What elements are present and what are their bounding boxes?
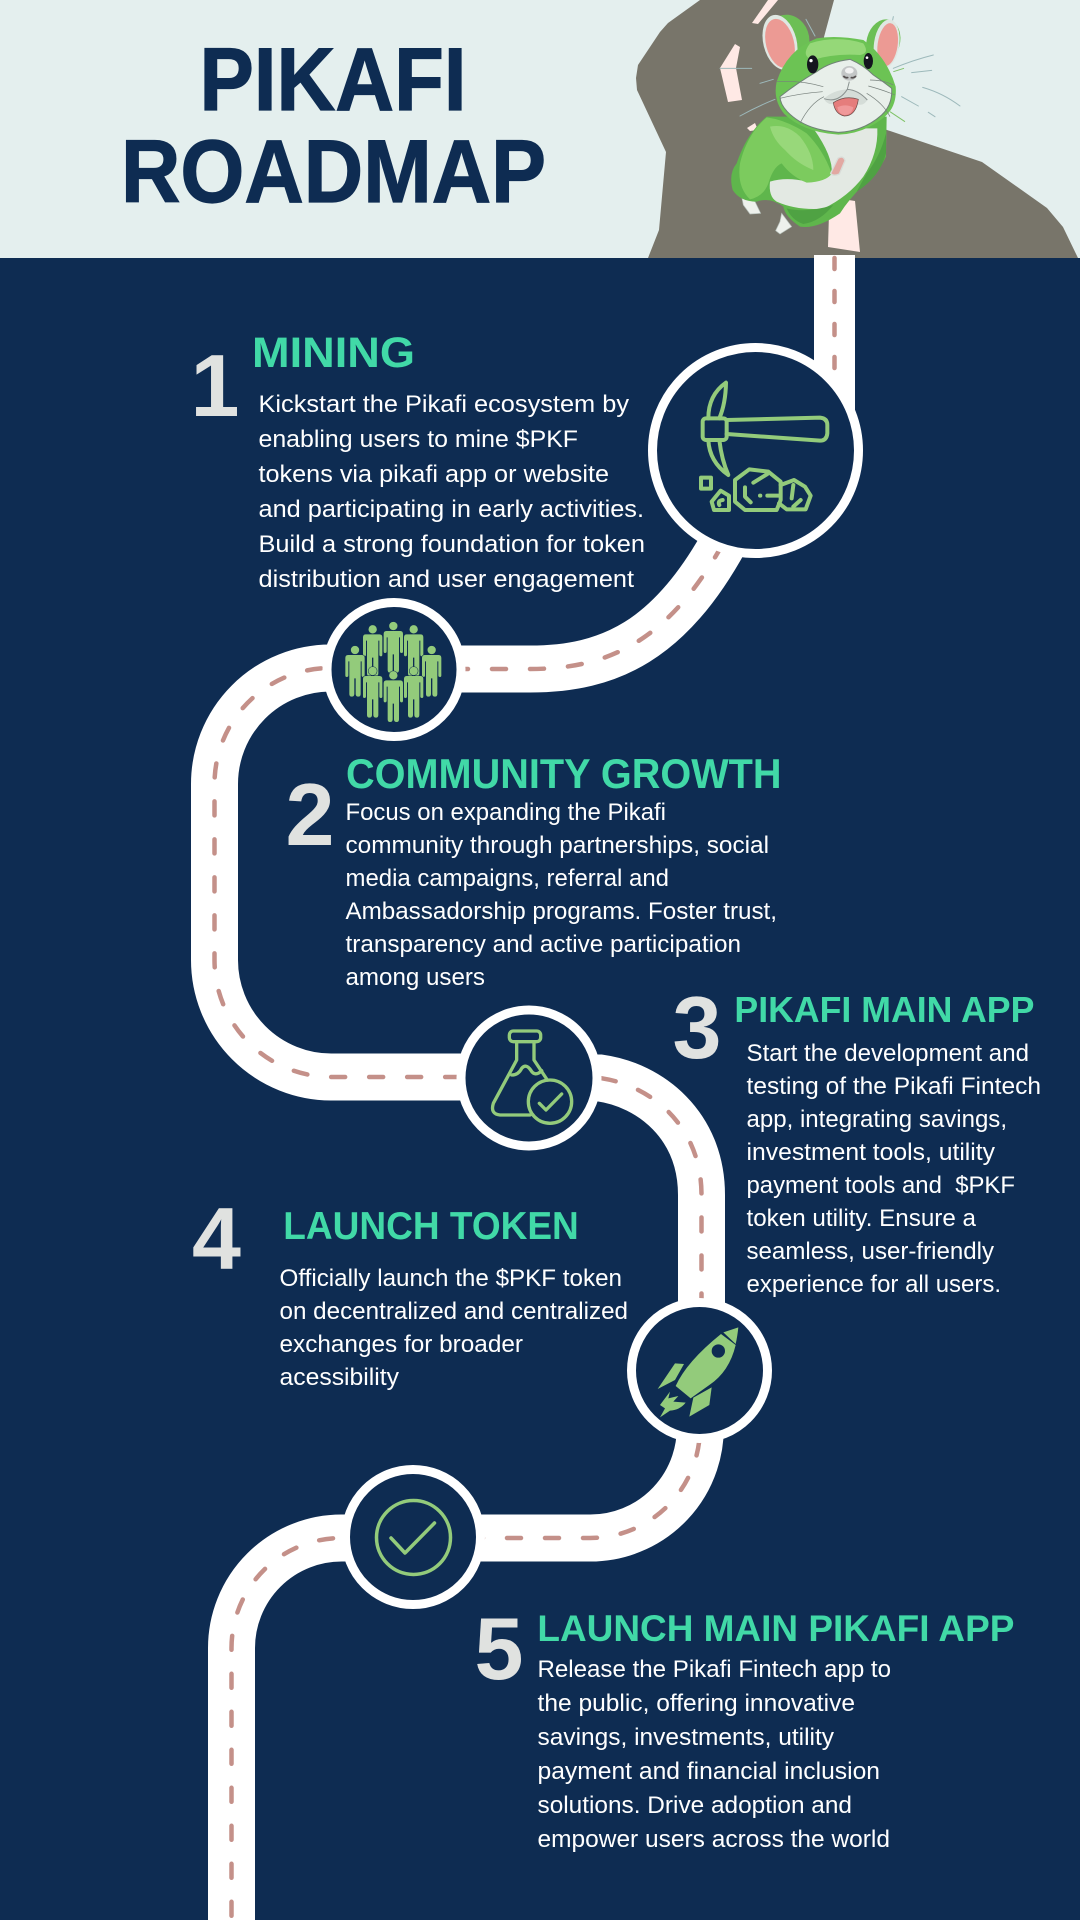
centre-line dashes [214, 255, 834, 1920]
body text: launch main pikafi app [538, 1656, 891, 1853]
body text: community growth: Focus on expanding the Pikafi [346, 799, 666, 826]
body text: mining: enabling users to mine $PKF [258, 426, 578, 453]
body text: pikafi main app: Start the development and [746, 1040, 1029, 1067]
body text: launch token: on decentralized and centralized [280, 1298, 628, 1325]
panel: step 4 launch token [192, 1189, 628, 1391]
body text: community growth: among users [346, 964, 485, 991]
heading: pikafi main app: PIKAFI MAIN APP [734, 989, 1034, 1030]
body text: mining: and participating in early activities. [258, 496, 644, 523]
icon: check mark in circle [346, 1470, 480, 1604]
heading: launch token: LAUNCH TOKEN [283, 1205, 579, 1248]
body text: community growth [346, 799, 777, 991]
road segment from mining to community [450, 540, 725, 669]
body text: mining [258, 391, 645, 593]
body text: mining: Build a strong foundation for token [258, 531, 645, 558]
feet [742, 189, 854, 234]
road segment from community to main app [214, 668, 470, 1077]
road segment to page bottom [232, 1538, 350, 1920]
panel: step 5 launch main pikafi app [475, 1599, 1014, 1853]
body text: launch main pikafi app: Release the Pikafi Fintech app to [538, 1656, 891, 1683]
body text: launch main pikafi app: payment and financial inclusion [538, 1758, 880, 1785]
mascot: green hamster [720, 9, 960, 234]
ears [761, 9, 816, 68]
heading: community growth: COMMUNITY GROWTH [346, 750, 782, 797]
road segment from main app to launch token [590, 1078, 702, 1320]
icon: flask with check in circle [461, 1010, 597, 1146]
body text: launch main pikafi app: savings, investments, utility [538, 1724, 835, 1751]
icon: community people in circle [327, 602, 461, 736]
body text: pikafi main app: testing of the Pikafi Fintech [746, 1073, 1041, 1100]
body text: community growth: Ambassadorship programs. Foster trust, [346, 898, 777, 925]
header panel [0, 0, 1080, 258]
title: ROADMAP [121, 121, 546, 221]
body text: mining: Kickstart the Pikafi ecosystem by [258, 391, 630, 418]
road segment from header to mining [814, 255, 855, 420]
number 5: 5 [475, 1599, 523, 1698]
body text: pikafi main app: investment tools, utility [746, 1139, 996, 1166]
heading: mining: MINING [252, 329, 415, 377]
body text: pikafi main app: token utility. Ensure a [746, 1205, 976, 1232]
body [731, 117, 887, 227]
nose and mouth [841, 66, 857, 81]
head [776, 37, 896, 135]
body text: launch token: acessibility [280, 1364, 400, 1391]
body text: launch token: Officially launch the $PKF token [280, 1265, 622, 1292]
header road illustration [636, 0, 1078, 258]
title: PIKAFI [200, 29, 466, 129]
heading: launch main pikafi app: LAUNCH MAIN PIKAFI APP [537, 1608, 1014, 1649]
number 1: 1 [191, 336, 239, 435]
panel: step 1 mining [191, 329, 645, 593]
number 2: 2 [286, 765, 334, 864]
road path [214, 255, 834, 1920]
body text: community growth: transparency and active participation [346, 931, 741, 958]
header background [0, 0, 1080, 258]
panel: step 3 pikafi main app [673, 978, 1041, 1298]
title [121, 29, 546, 221]
body text: pikafi main app: experience for all users. [746, 1271, 1001, 1298]
body text: community growth: community through partnerships, social [346, 832, 769, 859]
body text: launch main pikafi app: solutions. Drive adoption and [538, 1792, 852, 1819]
panel: step 2 community growth [286, 750, 782, 991]
body text: pikafi main app: seamless, user-friendly [746, 1238, 995, 1265]
body text: launch main pikafi app: empower users across the world [538, 1826, 890, 1853]
eyes [807, 55, 818, 73]
arm and leg highlight [739, 117, 832, 199]
number 3: 3 [673, 978, 721, 1077]
body text: mining: distribution and user engagement [258, 566, 634, 593]
body text: pikafi main app: payment tools and $PKF [746, 1172, 1015, 1199]
body text: pikafi main app: app, integrating savings, [746, 1106, 1007, 1133]
body text: mining: tokens via pikafi app or website [258, 461, 609, 488]
body text: pikafi main app [746, 1040, 1041, 1298]
icon: pickaxe in circle [652, 348, 858, 554]
body text: launch token [280, 1265, 628, 1391]
number 4: 4 [192, 1189, 241, 1288]
body text: community growth: media campaigns, referral and [346, 865, 669, 892]
body text: launch main pikafi app: the public, offering innovative [538, 1690, 855, 1717]
body text: launch token: exchanges for broader [280, 1331, 523, 1358]
whiskers [777, 80, 895, 123]
road segment from launch token to launch app [470, 1420, 700, 1538]
icon: rocket in circle [632, 1302, 768, 1438]
